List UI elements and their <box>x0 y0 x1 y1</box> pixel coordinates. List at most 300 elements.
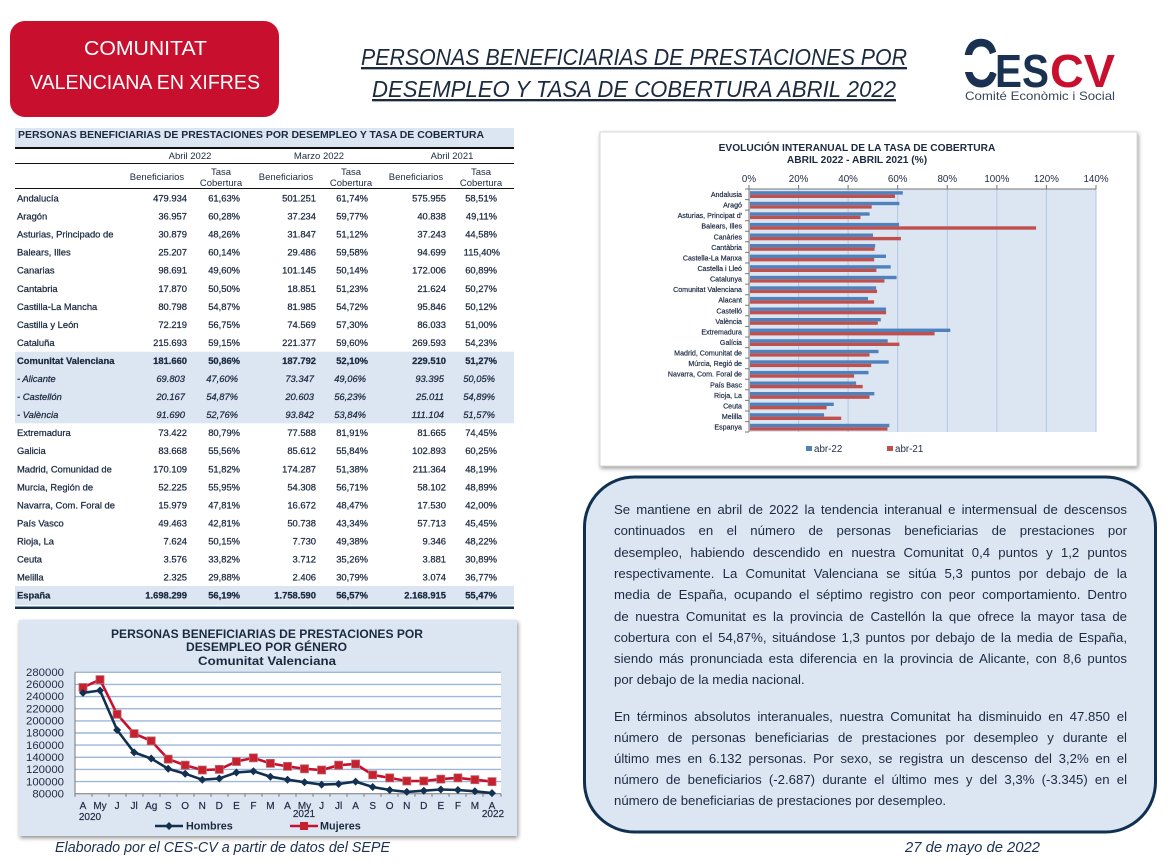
table rows: 181.660 <box>153 355 187 366</box>
table rows: 25.011 <box>415 391 444 402</box>
table rows: 15.979 <box>158 499 187 510</box>
line chart x axis labels: E <box>437 801 444 812</box>
line chart y axis labels: 280000 <box>26 667 64 679</box>
line chart x axis labels: S <box>165 801 172 812</box>
table column headers <box>130 151 503 189</box>
table rows: 81.985 <box>287 301 316 312</box>
line chart x axis labels: A <box>284 801 291 812</box>
bar chart category labels: Andalusia <box>711 191 742 199</box>
line chart x axis labels: Ag <box>145 801 157 812</box>
table column headers: Marzo 2022 <box>294 151 344 162</box>
commentary text: continuados en el número de personas beneficiarias de prestaciones por <box>614 523 1127 538</box>
table rows: 187.792 <box>282 355 316 366</box>
table rows: 48,19% <box>465 463 497 474</box>
commentary text: En términos absolutos interanuales, nuestra Comunitat ha disminuido en 47.850 el <box>614 709 1127 724</box>
line chart x axis labels: A <box>489 801 496 812</box>
table rows: 51,82% <box>208 463 240 474</box>
line chart y axis labels: 240000 <box>26 691 64 703</box>
table rows: 43,34% <box>336 518 368 528</box>
table rows: 49,11% <box>466 210 497 222</box>
table rows: 61,74% <box>336 192 368 204</box>
commentary text: Se mantiene en abril de 2022 la tendencia interanual e intermensual de descensos <box>614 502 1127 517</box>
data table: beneficiaries and coverage rate <box>15 128 514 609</box>
table rows: 17.530 <box>417 499 446 510</box>
table rows: 3.576 <box>164 554 187 565</box>
commentary text: de nuestra Comunitat es la provincia de Castellón la que ofrece la mayor tasa de <box>614 608 1127 624</box>
table rows: Cataluña <box>17 337 55 348</box>
table rows: 2.168.915 <box>404 590 446 601</box>
bar chart category labels: Castella-La Manxa <box>683 254 742 262</box>
table rows: 93.395 <box>415 373 445 384</box>
table rows: 42,00% <box>465 499 497 510</box>
bar chart x axis labels: 120% <box>1034 174 1059 185</box>
table rows: 53,84% <box>334 409 366 420</box>
table column headers: Cobertura <box>460 178 503 189</box>
table rows: 18.851 <box>287 283 316 294</box>
table rows: 575.955 <box>412 192 446 204</box>
table rows: 51,12% <box>336 229 368 240</box>
table rows: 59,15% <box>208 337 240 348</box>
panel: line chart by gender <box>19 620 517 836</box>
line chart x axis labels <box>79 801 505 823</box>
line chart y axis labels: 100000 <box>26 776 64 788</box>
table rows: 69.803 <box>156 373 186 384</box>
line chart x axis labels: 2022 <box>482 809 505 820</box>
table column headers: Abril 2022 <box>169 151 211 162</box>
bar chart x axis labels: 60% <box>888 174 908 185</box>
table rows: 49,06% <box>334 373 366 384</box>
table rows: 77.588 <box>287 427 316 438</box>
table rows: País Vasco <box>17 518 64 528</box>
table rows: 170.109 <box>153 463 187 474</box>
table column headers: Cobertura <box>200 178 243 189</box>
table rows: 56,19% <box>208 590 241 601</box>
bar chart category labels: Cantàbria <box>711 244 742 252</box>
main title: PERSONAS BENEFICIARIAS DE PRESTACIONES POR <box>361 44 907 70</box>
line chart x axis labels: 2020 <box>79 812 102 823</box>
bar chart legend: abr-21 <box>895 444 923 455</box>
bar chart category labels: Castelló <box>716 307 742 315</box>
table rows: 54,87% <box>206 391 238 402</box>
table rows: 9.346 <box>423 536 446 546</box>
table rows: 94.699 <box>417 247 446 258</box>
table rows: 73.347 <box>285 373 315 384</box>
line chart x axis labels: M <box>266 801 275 812</box>
table rows: 211.364 <box>413 463 446 474</box>
commentary text: por debajo de la media nacional. <box>614 672 805 687</box>
table rows: 101.145 <box>282 265 316 276</box>
table rows: 54.308 <box>287 481 316 492</box>
table rows: 54,72% <box>336 301 368 312</box>
table rows: 2.406 <box>293 572 316 583</box>
table rows: Comunitat Valenciana <box>17 355 115 366</box>
line chart x axis labels: M <box>471 801 479 812</box>
table rows: 55,84% <box>336 445 368 456</box>
table rows: 95.846 <box>417 301 446 312</box>
table rows: 72.219 <box>158 319 187 330</box>
line chart y axis labels: 260000 <box>26 679 64 691</box>
table rows: Navarra, Com. Foral de <box>17 499 115 510</box>
logo: CES-CV: Comité Econòmic i Social <box>965 89 1115 103</box>
table rows: Balears, Illes <box>17 247 71 258</box>
line chart legend: Hombres <box>186 820 233 832</box>
table rows: 29.486 <box>287 247 316 258</box>
table rows: 56,75% <box>208 319 240 330</box>
line chart x axis labels: My <box>93 801 107 812</box>
table column headers: Abril 2021 <box>431 151 473 162</box>
table rows: 51,27% <box>465 355 498 366</box>
main title: DESEMPLEO Y TASA DE COBERTURA ABRIL 2022 <box>372 76 896 102</box>
line chart x axis labels: O <box>181 801 189 812</box>
table rows: 174.287 <box>282 463 316 474</box>
table rows: 33,82% <box>208 554 240 565</box>
bar chart legend <box>806 444 923 455</box>
table rows: 21.624 <box>417 283 446 294</box>
table rows: - Alicante <box>17 373 56 384</box>
table rows: 48,89% <box>465 481 497 492</box>
line chart x axis labels: My <box>298 801 311 812</box>
panel: bar chart coverage rate evolution <box>600 132 1137 466</box>
table column headers: Tasa <box>471 167 492 178</box>
table rows: Ceuta <box>17 554 43 565</box>
line chart x axis labels: Jl <box>335 801 342 812</box>
table rows: 3.881 <box>423 554 446 565</box>
table rows: - Castellón <box>17 391 62 402</box>
bar chart category labels: Navarra, Com. Foral de <box>668 371 742 379</box>
table rows: 16.672 <box>287 499 316 510</box>
table rows: 61,63% <box>208 192 240 204</box>
bar chart category labels: Asturias, Principat d' <box>678 212 742 220</box>
table rows: 54,87% <box>208 301 240 312</box>
table rows: Castilla-La Mancha <box>17 301 98 312</box>
bar chart category labels: Galícia <box>720 339 742 347</box>
table rows: 501.251 <box>282 192 316 204</box>
table rows: Canarias <box>17 265 55 276</box>
table rows: Galicia <box>17 445 46 456</box>
table rows: 60,25% <box>465 445 497 456</box>
bar chart category labels: Extremadura <box>701 328 742 336</box>
bar chart category labels: Canàries <box>714 233 742 241</box>
line chart x axis labels: N <box>403 801 410 812</box>
table rows: 229.510 <box>412 355 446 366</box>
commentary text <box>614 502 1127 808</box>
table rows: 60,89% <box>465 265 497 276</box>
table rows: 269.593 <box>412 337 446 348</box>
table rows: 172.006 <box>412 265 446 276</box>
commentary text: número de beneficiarios (-2.687) durante el último mes y del 3,3% (-3.345) en el <box>614 772 1127 787</box>
table rows: 102.893 <box>412 445 446 456</box>
line chart legend: Mujeres <box>320 820 361 832</box>
table rows: 49.463 <box>158 518 187 528</box>
table rows: Asturias, Principado de <box>17 229 113 240</box>
red title badge <box>10 21 279 117</box>
table rows: 47,81% <box>208 499 240 510</box>
table rows: 36,77% <box>465 572 497 583</box>
table rows: 56,57% <box>336 590 369 601</box>
table rows: 30.879 <box>158 229 187 240</box>
bar chart category labels: València <box>715 318 742 326</box>
bar chart category labels: Comunitat Valenciana <box>673 286 742 294</box>
bar chart category labels: Ceuta <box>723 402 742 410</box>
table rows: 85.612 <box>287 445 316 456</box>
bars: abr-22 <box>750 191 950 427</box>
table rows: 51,38% <box>336 463 368 474</box>
table column headers: Tasa <box>341 167 362 178</box>
bar chart x axis labels <box>742 174 1109 185</box>
table rows: 93.842 <box>285 409 315 420</box>
table rows: 3.712 <box>293 554 316 565</box>
line chart x axis labels: J <box>115 801 120 812</box>
table rows: 54,23% <box>465 337 497 348</box>
line chart legend <box>155 820 361 832</box>
table rows: 55,47% <box>465 590 498 601</box>
line chart x axis labels: F <box>250 801 256 812</box>
table rows: 59,77% <box>336 210 368 222</box>
bar chart title <box>719 141 996 166</box>
bar chart x axis labels: 140% <box>1083 174 1109 185</box>
table rows: 98.691 <box>158 265 187 276</box>
table rows: 73.422 <box>158 427 187 438</box>
bar chart category labels: Espanya <box>714 424 742 432</box>
logo: CES-CV: CV <box>1050 45 1115 97</box>
bar chart category labels: Rioja, La <box>714 392 742 400</box>
line chart y axis labels: 120000 <box>26 764 64 776</box>
line chart title: DESEMPLEO POR GÉNERO <box>186 640 347 654</box>
line chart x axis labels: F <box>455 801 461 812</box>
line chart x axis labels: Jl <box>130 801 138 812</box>
table rows: 59,58% <box>336 247 368 258</box>
line chart title <box>111 627 423 668</box>
line chart y axis labels <box>26 667 64 800</box>
table rows: 83.668 <box>158 445 187 456</box>
table rows: 57.713 <box>417 518 446 528</box>
table rows: 60,28% <box>208 210 240 222</box>
bar chart x axis labels: 40% <box>838 174 858 185</box>
line chart y axis labels: 140000 <box>26 752 64 764</box>
bar chart title: EVOLUCIÓN INTERANUAL DE LA TASA DE COBERTURA <box>719 141 996 154</box>
bar chart category labels: Catalunya <box>710 276 742 284</box>
table rows: 37.234 <box>287 210 316 222</box>
line series: Hombres <box>79 686 496 797</box>
table rows: 56,23% <box>334 391 366 402</box>
table rows: Madrid, Comunidad de <box>17 463 112 474</box>
line chart x axis labels: N <box>199 801 206 812</box>
line chart y axis labels: 160000 <box>26 740 64 752</box>
commentary text: cobertura con el 54,87%, situándose 1,3 puntos por debajo de la media de España, <box>614 630 1127 645</box>
table rows: 49,60% <box>208 265 240 276</box>
logo: CES-CV: ES <box>995 45 1049 97</box>
table rows: 50,12% <box>465 301 497 312</box>
bar chart x axis labels: 0% <box>742 174 756 185</box>
bar chart category labels: Melilla <box>722 413 742 421</box>
bar chart category labels: País Basc <box>710 381 742 389</box>
commentary text: siendo más pronunciada esta diferencia en la provincia de Alicante, con 8,6 puntos <box>614 651 1127 666</box>
table rows: 55,95% <box>208 481 240 492</box>
logo: CES-CV: C <box>962 25 998 102</box>
table rows: Murcia, Región de <box>17 481 93 492</box>
commentary text: media de España, ocupando el séptimo registro con peor comportamiento. Dentro <box>614 587 1127 602</box>
table rows: 31.847 <box>287 229 316 240</box>
line chart x axis labels: D <box>216 801 223 812</box>
line chart x axis labels: E <box>233 801 240 812</box>
table rows: 86.033 <box>417 319 446 330</box>
table rows: Aragón <box>17 210 47 222</box>
table rows: 50,15% <box>208 536 240 546</box>
source note: Elaborado por el CES-CV a partir de datos del SEPE <box>55 840 390 856</box>
table rows: 52,76% <box>206 409 238 420</box>
table rows: 115,40% <box>464 247 500 258</box>
commentary text: desempleo, habiendo descendido en nuestra Comunitat 0,4 puntos y 1,2 puntos <box>614 544 1127 560</box>
table rows: 221.377 <box>282 337 316 348</box>
table rows: 50,86% <box>208 355 241 366</box>
table rows: 29,88% <box>208 572 240 583</box>
table rows: 1.758.590 <box>274 590 316 601</box>
bars: abr-21 <box>750 195 1036 431</box>
bar chart category labels: Múrcia, Regió de <box>688 360 742 368</box>
table column headers: Beneficiarios <box>259 172 313 183</box>
panel: commentary box background <box>584 477 1156 832</box>
bar chart legend: abr-22 <box>814 444 842 455</box>
table column headers: Cobertura <box>330 178 373 189</box>
table rows: 51,57% <box>463 409 495 420</box>
table rows: 48,26% <box>208 229 240 240</box>
red title badge: VALENCIANA EN XIFRES <box>30 71 260 94</box>
table rows: Andalucía <box>17 192 59 204</box>
table rows: 7.730 <box>293 536 316 546</box>
table rows: 7.624 <box>164 536 187 546</box>
table rows: 48,47% <box>336 499 368 510</box>
table rows: - València <box>17 409 58 420</box>
table rows: Castilla y León <box>17 319 78 330</box>
table rows: 50,05% <box>463 373 495 384</box>
table rows: 45,45% <box>465 518 497 528</box>
table rows: 25.207 <box>158 247 187 258</box>
commentary text: último mes en 6.132 personas. Por sexo, se registra un descenso del 3,2% en el <box>614 751 1127 766</box>
table rows: Melilla <box>17 572 44 583</box>
line chart y axis labels: 220000 <box>26 703 64 715</box>
table rows: 30,89% <box>465 554 497 565</box>
date note: 27 de mayo de 2022 <box>904 840 1040 856</box>
table rows: 56,71% <box>336 481 368 492</box>
table rows: 54,89% <box>463 391 495 402</box>
line chart x axis labels: A <box>352 801 359 812</box>
table rows: 49,38% <box>336 536 368 546</box>
table rows: 36.957 <box>158 210 187 222</box>
table rows: 35,26% <box>336 554 368 565</box>
logo: CES-CV <box>958 25 1115 103</box>
table rows: 55,56% <box>208 445 240 456</box>
table rows: 17.870 <box>158 283 187 294</box>
bar chart x axis labels: 100% <box>984 174 1010 185</box>
table rows: 1.698.299 <box>145 590 187 601</box>
table rows: 58.102 <box>417 481 446 492</box>
table column headers: Beneficiarios <box>389 172 443 183</box>
table rows: 80.798 <box>158 301 187 312</box>
bar chart x axis labels: 20% <box>789 174 809 185</box>
bar chart category labels <box>668 191 742 432</box>
table rows: 74,45% <box>465 427 497 438</box>
table rows: 50,27% <box>465 283 497 294</box>
line chart plot area <box>75 672 501 794</box>
bar chart x axis labels: 80% <box>937 174 957 185</box>
bar chart category labels: Madrid, Comunitat de <box>674 350 742 358</box>
line chart x axis labels: O <box>386 801 394 812</box>
table column headers: Beneficiarios <box>130 172 184 183</box>
bar chart title: ABRIL 2022 - ABRIL 2021 (%) <box>787 155 927 166</box>
line chart x axis labels: J <box>319 801 324 812</box>
table rows: 42,81% <box>208 518 240 528</box>
line series: Mujeres <box>79 676 496 786</box>
table rows: 37.243 <box>417 229 446 240</box>
table rows: 215.693 <box>153 337 187 348</box>
table rows: 52.225 <box>158 481 187 492</box>
table rows: España <box>17 590 51 601</box>
table rows: 81,91% <box>336 427 368 438</box>
table rows: 50.738 <box>287 518 316 528</box>
table rows: 59,60% <box>336 337 368 348</box>
table title: PERSONAS BENEFICIARIAS DE PRESTACIONES POR DESEMPLEO Y TASA DE COBERTURA <box>18 130 485 141</box>
bar chart category labels: Castella i Lleó <box>697 265 742 273</box>
table rows: 20.167 <box>155 391 186 402</box>
table rows: 80,79% <box>208 427 240 438</box>
table rows: 74.569 <box>287 319 316 330</box>
line chart y axis labels: 200000 <box>26 716 64 728</box>
table rows <box>17 192 500 601</box>
commentary text: respectivamente. La Comunitat Valenciana se sitúa 5,3 puntos por debajo de la <box>614 566 1127 581</box>
red title badge: COMUNITAT <box>84 37 207 60</box>
table rows: 30,79% <box>336 572 368 583</box>
table rows: 20.603 <box>284 391 315 402</box>
table rows: 52,10% <box>336 355 369 366</box>
table column headers: Tasa <box>211 167 232 178</box>
table rows: 40.838 <box>417 210 446 222</box>
table rows: 479.934 <box>153 192 187 204</box>
table rows: 50,14% <box>336 265 368 276</box>
table rows: 51,23% <box>336 283 368 294</box>
table rows: 3.074 <box>423 572 446 583</box>
line chart y axis labels: 80000 <box>32 788 64 800</box>
table rows: 51,00% <box>465 319 497 330</box>
table rows: 50,50% <box>208 283 240 294</box>
table rows: Extremadura <box>17 427 71 438</box>
table rows: 60,14% <box>208 247 240 258</box>
line chart title: PERSONAS BENEFICIARIAS DE PRESTACIONES POR <box>111 627 423 641</box>
bar chart category labels: Alacant <box>718 297 742 305</box>
line chart title: Comunitat Valenciana <box>198 654 336 668</box>
table rows: 48,22% <box>465 536 497 546</box>
bar chart plot area <box>749 189 1096 432</box>
table rows: 91.690 <box>156 409 186 420</box>
table rows: 57,30% <box>336 319 368 330</box>
line chart x axis labels: A <box>80 801 87 812</box>
line chart y axis labels: 180000 <box>26 728 64 740</box>
bar chart category labels: Aragó <box>723 202 742 210</box>
table rows: 81.665 <box>417 427 446 438</box>
table rows: 44,58% <box>465 229 497 240</box>
table rows: 2.325 <box>164 572 187 583</box>
main title <box>361 44 907 102</box>
commentary text: número de personas beneficiarias de prestaciones por desempleo y durante el <box>614 730 1127 745</box>
table rows: Cantabria <box>17 283 58 294</box>
table rows: 111.104 <box>412 409 444 420</box>
table rows: 58,51% <box>465 192 497 204</box>
commentary text: número de beneficiarias de prestaciones por desempleo. <box>614 793 946 808</box>
bar chart category labels: Balears, Illes <box>701 223 742 231</box>
table rows: 47,60% <box>206 373 238 384</box>
table rows: Rioja, La <box>17 536 55 546</box>
line chart x axis labels: D <box>420 801 427 812</box>
line chart x axis labels: 2021 <box>293 809 316 820</box>
